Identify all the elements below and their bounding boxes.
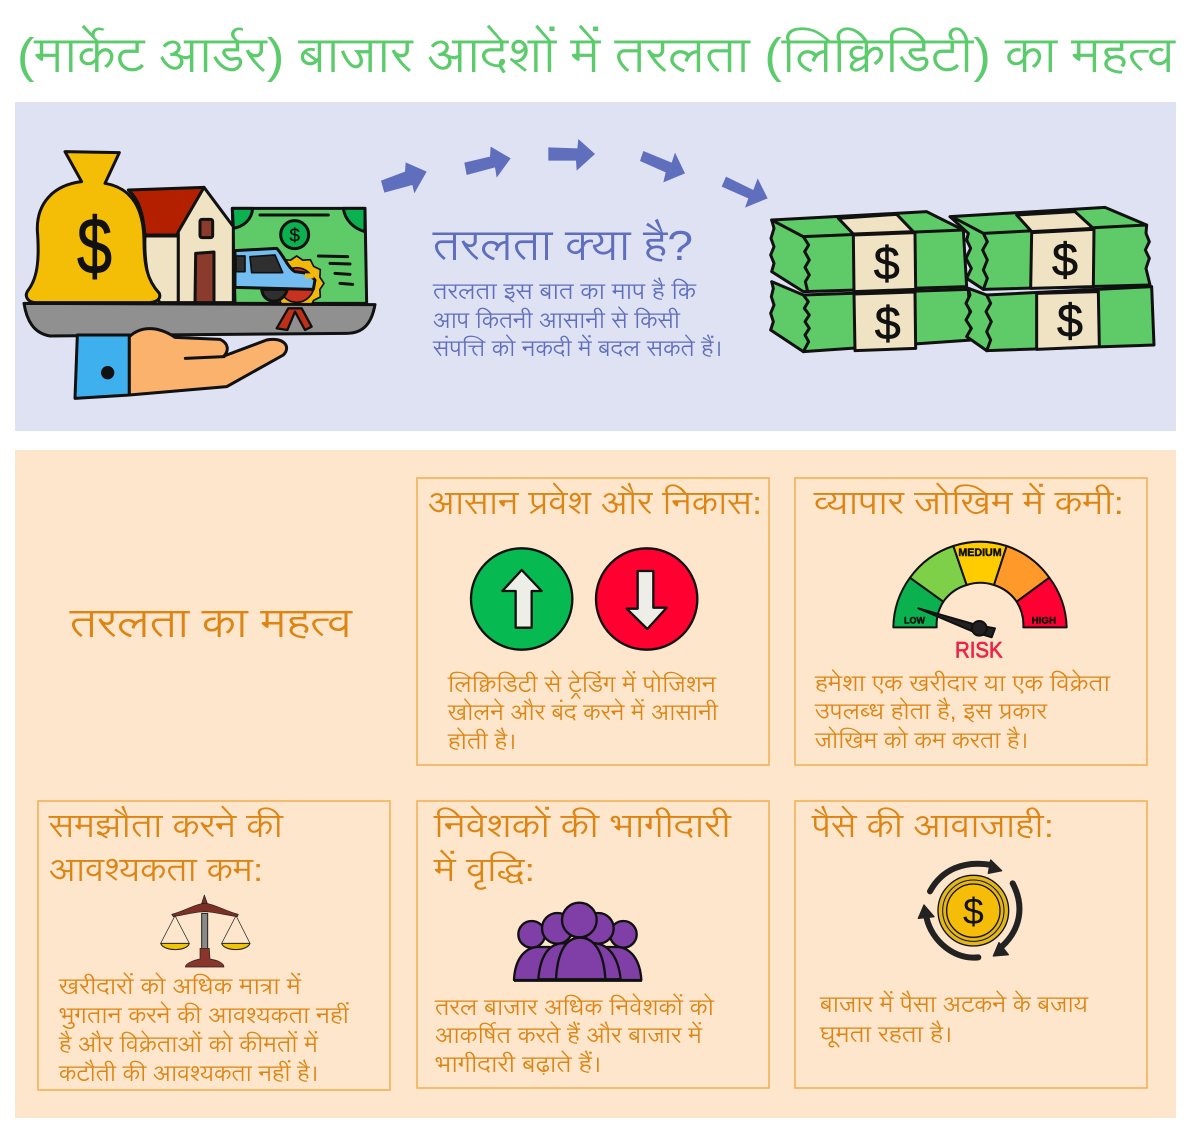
card: money movement	[795, 801, 1147, 1088]
heading: importance: तरलता का महत्व	[69, 602, 353, 646]
icon: risk gauge: HIGH	[1032, 616, 1056, 626]
icon: stacks of cash	[771, 207, 1154, 352]
icon: balance scale	[161, 895, 250, 967]
title: (मार्केट आर्डर) बाजार आदेशों में तरलता (लिक्विडिटी) का महत्व	[17, 25, 1177, 83]
panel: what is liquidity	[15, 102, 1176, 431]
card: money movement: घूमता रहता है।	[819, 1021, 952, 1048]
card: money movement: बाजार में पैसा अटकने के बजाय	[819, 991, 1089, 1017]
text: definition: आप कितनी आसानी से किसी	[433, 307, 681, 333]
card: greater investor participation: तरल बाजार अधिक निवेशकों को	[434, 994, 715, 1020]
icon: risk gauge: RISK	[955, 637, 1003, 662]
icon: hand holding tray of assets	[24, 152, 375, 398]
icon: stacks of cash: $	[1057, 295, 1083, 347]
card: less need for compromise: आवश्यकता कम:	[49, 852, 263, 888]
card: greater investor participation	[417, 801, 769, 1088]
card: greater investor participation: भागीदारी बढ़ाते हैं।	[435, 1051, 601, 1077]
icon: hand holding tray of assets: $	[289, 224, 300, 245]
card: easy entry and exit: खोलने और बंद करने में आसानी	[447, 699, 719, 725]
card: easy entry and exit: होती है।	[447, 728, 516, 754]
icon: circulating coin	[918, 860, 1019, 958]
card: greater investor participation: आकर्षित करते हैं और बाजार में	[435, 1022, 703, 1048]
card: easy entry and exit: लिक्विडिटी से ट्रेडिंग में पोजिशन	[447, 671, 716, 699]
card: less need for compromise: है और विक्रेताओं को कीमतों में	[58, 1031, 319, 1057]
card: greater investor participation: निवेशकों की भागीदारी	[433, 805, 732, 844]
card: less need for compromise	[38, 801, 390, 1090]
text: definition: तरलता इस बात का माप है कि	[432, 278, 697, 304]
heading: what is liquidity: तरलता क्या है?	[432, 219, 693, 269]
card: less need for compromise: समझौता करने की	[48, 805, 284, 844]
icon: circulating coin: $	[963, 890, 984, 932]
card: less need for compromise: भुगतान करने की आवश्यकता नहीं	[59, 1002, 350, 1029]
icon: up and down arrows	[471, 548, 697, 650]
card: easy entry and exit	[417, 478, 769, 765]
text: definition	[432, 278, 722, 361]
card: greater investor participation: में वृद्धि:	[433, 849, 535, 890]
card: reduced trade risk	[795, 478, 1147, 765]
card: money movement: पैसे की आवाजाही:	[811, 805, 1054, 844]
card: reduced trade risk: उपलब्ध होता है, इस प्रकार	[814, 698, 1048, 724]
icon: stacks of cash: $	[874, 237, 900, 289]
icon: risk gauge: MEDIUM	[958, 547, 1002, 559]
card: reduced trade risk: जोखिम को कम करता है।	[814, 727, 1028, 753]
icon: group of people	[514, 903, 642, 981]
icon: hand holding tray of assets: $	[77, 201, 112, 290]
card: easy entry and exit: आसान प्रवेश और निकास:	[428, 482, 762, 521]
card: less need for compromise: खरीदारों को अधिक मात्रा में	[58, 973, 302, 999]
card: reduced trade risk: व्यापार जोखिम में कमी:	[813, 482, 1124, 521]
arrows: conversion to cash	[381, 139, 768, 208]
icon: stacks of cash: $	[875, 297, 901, 349]
icon: risk gauge: LOW	[904, 616, 925, 626]
icon: risk gauge	[893, 542, 1067, 662]
card: less need for compromise: कटौती की आवश्यकता नहीं है।	[58, 1060, 318, 1086]
text: definition: संपत्ति को नकदी में बदल सकते हैं।	[432, 335, 722, 361]
card: reduced trade risk: हमेशा एक खरीदार या एक विक्रेता	[814, 670, 1111, 696]
icon: stacks of cash: $	[1052, 234, 1078, 286]
panel: importance of liquidity	[15, 450, 1176, 1118]
